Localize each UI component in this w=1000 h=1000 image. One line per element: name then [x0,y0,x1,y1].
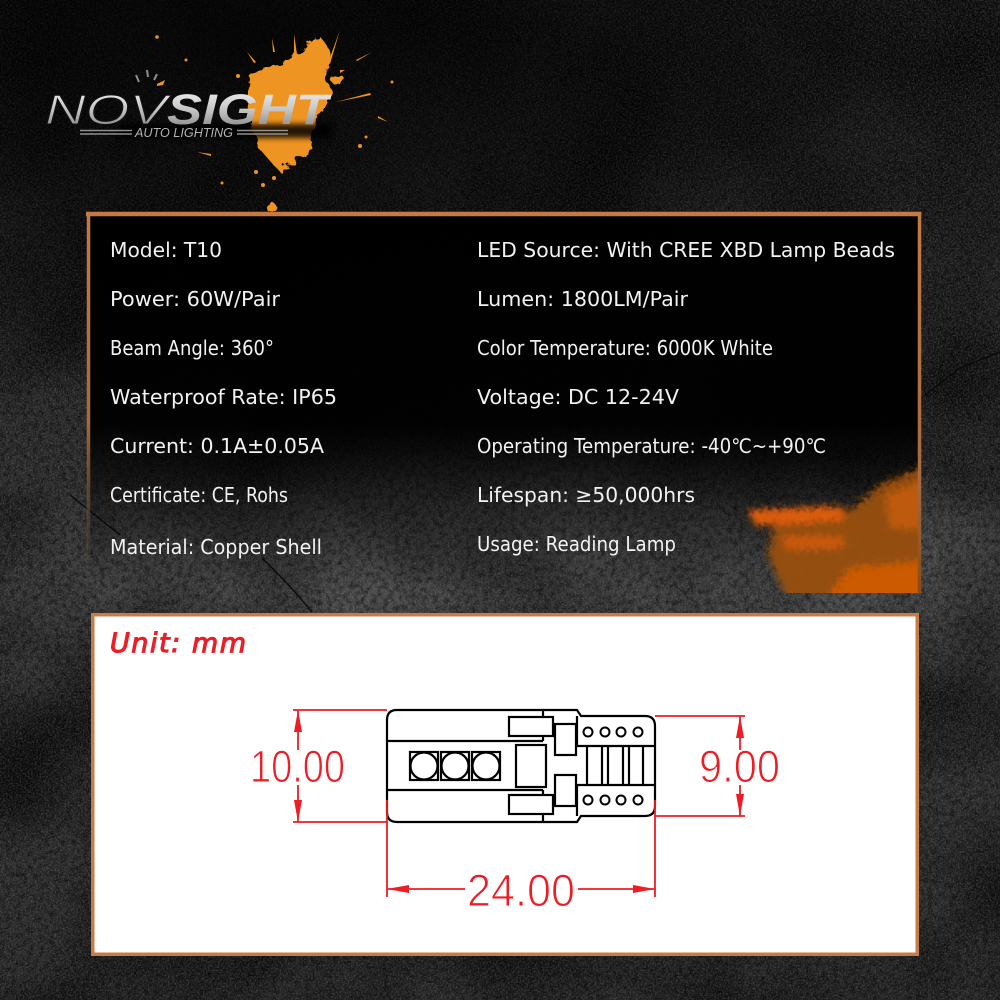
logo: NOVSIGHT AUTO LIGHTING: NOV [45,86,172,133]
specifications: right column: LED Source: With CREE XBD Lamp Beads [477,238,895,262]
specifications: right column: Operating Temperature: -40℃~+90℃ [477,434,826,458]
diagram: bulb outline [387,710,655,822]
heading: unit: Unit: mm [110,628,246,659]
specifications: left column: Material: Copper Shell [110,535,322,559]
specifications: left column: Model: T10 [110,238,222,262]
specifications: right column: Lumen: 1800LM/Pair [477,287,689,311]
specifications: left column: Waterproof Rate: IP65 [110,385,337,409]
orange paint patch [742,462,918,593]
specifications: left column: Beam Angle: 360° [110,336,274,360]
specifications: left column [110,238,337,559]
logo: orange paint splatter [155,30,394,213]
panel: dimensions [93,615,917,954]
dimension: 9.00: 9.00 [699,741,780,792]
dimension: 24.00: 24.00 [467,865,575,916]
logo: NOVSIGHT AUTO LIGHTING [45,70,333,140]
specifications: right column: Color Temperature: 6000K White [477,336,773,360]
logo: NOVSIGHT AUTO LIGHTING: AUTO LIGHTING [134,125,233,140]
dimension: 10.00: 10.00 [250,741,345,792]
panel: specifications [86,212,930,605]
specifications: right column: Usage: Reading Lamp [477,532,676,556]
specifications: right column: Voltage: DC 12-24V [477,385,679,409]
specifications: right column [477,238,895,556]
specifications: left column: Certificate: CE, Rohs [110,483,288,507]
diagram: dimension lines and arrows [293,710,745,897]
specifications: right column: Lifespan: ≥50,000hrs [477,483,695,507]
specifications: left column: Power: 60W/Pair [110,287,281,311]
LED chips [410,752,500,780]
logo: NOVSIGHT AUTO LIGHTING: SIGHT [167,86,333,134]
specifications: left column: Current: 0.1A±0.05A [110,434,324,458]
